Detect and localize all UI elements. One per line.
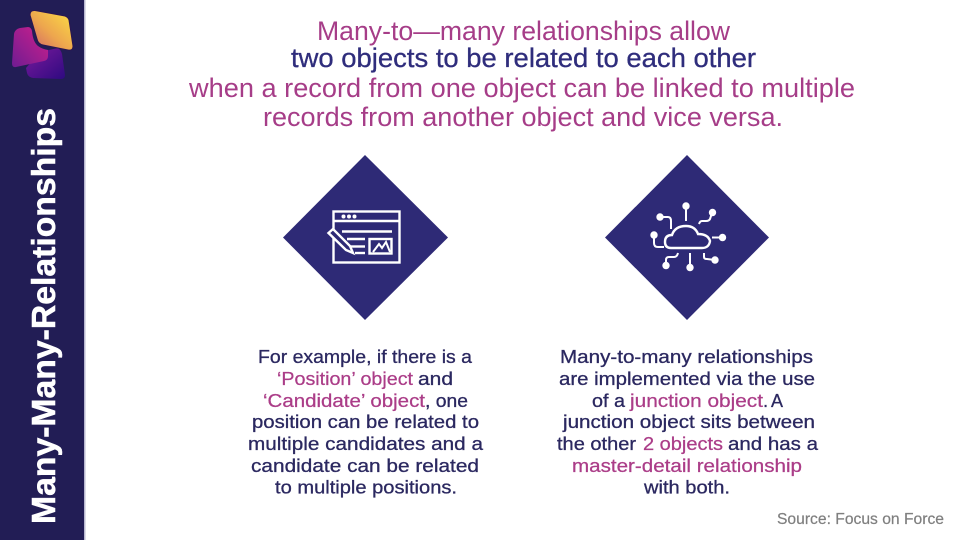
text block: implementation: A	[771, 390, 784, 411]
text block: example: to multiple positions.	[275, 476, 457, 498]
text block: implementation: are implemented via the use	[559, 368, 815, 389]
text block: example: For example, if there is a	[258, 346, 473, 367]
text block: example: ‘Candidate’ object	[263, 390, 425, 411]
text block: implementation: the other	[557, 433, 636, 454]
text block: implementation: master-detail relationship	[572, 455, 802, 476]
heading: Many-to—many relationships allow	[317, 16, 731, 46]
text block: implementation: junction object sits between	[562, 411, 815, 432]
text block: implementation: of a	[592, 390, 626, 411]
logo	[12, 10, 73, 79]
source note: Source: Focus on Force	[777, 511, 944, 528]
text block: example: candidate can be related	[251, 455, 479, 476]
heading	[188, 16, 855, 132]
text block: example: ‘Position’ object	[277, 368, 413, 389]
text block: example: and	[418, 368, 453, 389]
text block: example: multiple candidates and a	[248, 433, 484, 454]
icon: diamond with cloud network	[605, 155, 769, 320]
sidebar title: Many-Many-Relationships	[25, 108, 62, 524]
text block: implementation: .	[763, 390, 768, 411]
text block: implementation: and has a	[728, 433, 819, 454]
icon: diamond with browser and pencil	[283, 155, 448, 320]
text block: example: , one	[425, 390, 468, 411]
text block: example	[248, 346, 484, 498]
heading: when a record from one object can be linked to multiple	[188, 73, 855, 103]
text block: implementation	[557, 346, 819, 498]
text block: implementation: with both.	[643, 476, 730, 498]
heading: two objects to be related to each other	[291, 43, 756, 73]
sidebar	[0, 0, 86, 540]
text block: implementation: 2 objects	[643, 433, 723, 454]
heading: records from another object and vice versa.	[263, 102, 783, 132]
text block: example: position can be related to	[252, 411, 479, 432]
text block: implementation: junction object	[629, 390, 763, 411]
text block: implementation: Many-to-many relationships	[560, 346, 813, 367]
